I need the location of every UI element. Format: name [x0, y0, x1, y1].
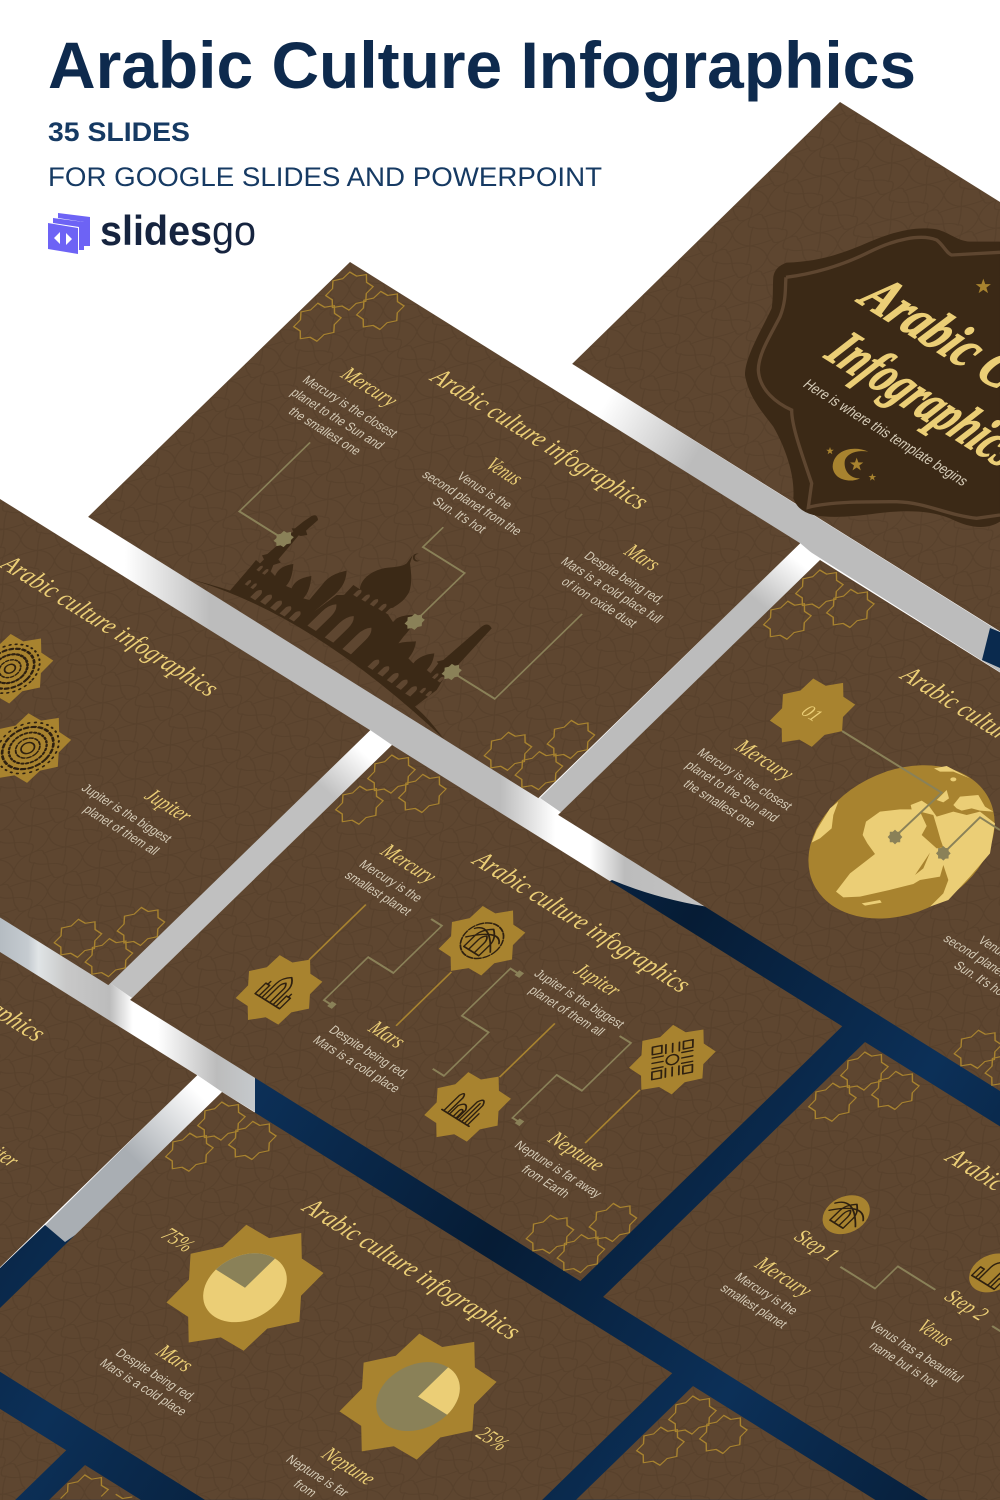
- finial crescent: [413, 554, 420, 562]
- text Mercury: the smallest one: [285, 404, 365, 458]
- star inside crescent: [850, 458, 863, 470]
- slide: pie charts: [0, 1092, 672, 1500]
- back sheet: [58, 213, 90, 246]
- text Venus: Venus has a beautiful: [866, 1319, 967, 1385]
- pie base: [186, 1240, 304, 1335]
- chevrons: [54, 232, 72, 245]
- corner ornaments bottom: [517, 1176, 646, 1280]
- connector three: [512, 1027, 631, 1134]
- header: [48, 28, 916, 254]
- inland sea: [920, 812, 943, 848]
- icon: tile: [652, 1040, 693, 1080]
- land upper right: [953, 795, 993, 812]
- corner ornaments: [45, 880, 174, 984]
- shadow band between mosque and globe slides: [540, 543, 820, 813]
- connector 02: [943, 817, 1000, 853]
- icon circle two: [959, 1246, 1000, 1300]
- inner motif: [459, 922, 506, 959]
- slide: bottom middle: [576, 1386, 875, 1500]
- mosque nodes: [269, 528, 466, 683]
- crescent: [833, 449, 868, 481]
- text Mars: Despite being red,: [112, 1346, 199, 1404]
- star with mandala two: [0, 699, 89, 797]
- gold line Mercury: [309, 905, 366, 960]
- text Mars: of iron oxide dust: [558, 575, 641, 630]
- shadow band under mosque slide: [60, 517, 1000, 1120]
- heading Jupiter: Jupiter: [568, 959, 626, 1001]
- slide: globe: [558, 560, 1000, 1096]
- land south: [862, 900, 882, 906]
- heading Mars: Mars: [150, 1340, 198, 1376]
- arches: [245, 565, 445, 697]
- star with tile icon: [611, 1011, 733, 1109]
- text Neptune: from: [290, 1477, 320, 1500]
- gold line Neptune: [585, 1090, 640, 1143]
- slide title: Arabic culture infographics: [465, 846, 697, 998]
- icon: [822, 1196, 871, 1233]
- narrow sea: [915, 853, 930, 875]
- text Jupiter: planet of them all: [526, 983, 608, 1039]
- mosque silhouette: [183, 515, 492, 738]
- land west: [812, 802, 838, 843]
- navy corner at right edge: [982, 628, 1000, 668]
- star upper right: [976, 279, 991, 293]
- text Venus: Venus is the: [454, 469, 516, 512]
- outer ring: [451, 916, 513, 965]
- pie chart 75 percent: [134, 1199, 356, 1376]
- text Jupiter: Jupiter is the biggest: [531, 967, 628, 1031]
- star left: [826, 447, 834, 454]
- icon: ornament: [451, 916, 513, 965]
- heading Venus: Venus: [912, 1316, 958, 1351]
- connector one: [324, 910, 442, 1016]
- text Mercury: planet to the Sun and: [682, 758, 782, 825]
- heading Jupiter: Jupiter: [139, 785, 197, 827]
- text Mars: Despite being red,: [581, 549, 668, 607]
- corner ornament one: [56, 1467, 113, 1500]
- centre circle: [666, 1054, 679, 1066]
- star: [421, 892, 543, 990]
- connector: [840, 1245, 935, 1312]
- text Venus: Sun. It's hot: [429, 495, 490, 536]
- disc: [959, 1246, 1000, 1300]
- slide: steps: [603, 1042, 1000, 1500]
- grid: [652, 1040, 693, 1080]
- icon circle one: [813, 1188, 880, 1241]
- star: [218, 941, 340, 1039]
- heading Neptune: Neptune: [542, 1127, 610, 1176]
- star: [407, 1058, 529, 1156]
- logo wordmark: slidesgo: [100, 207, 256, 254]
- slide background: [576, 1386, 875, 1500]
- land north: [934, 766, 970, 778]
- plaque: [745, 228, 1000, 527]
- node one: [327, 1001, 337, 1009]
- slide title: Arabic culture infographics: [0, 550, 225, 702]
- slide title: Arabic culture infographics: [423, 363, 655, 515]
- gold line Mars: [396, 972, 451, 1026]
- slide: bottom left: [49, 1465, 141, 1500]
- text Neptune: Neptune is far: [283, 1452, 352, 1500]
- slide: bottom far left: [0, 1169, 66, 1500]
- star: [134, 1199, 356, 1376]
- corner ornaments bottom: [945, 991, 1000, 1095]
- slide background: [130, 745, 842, 1281]
- text Mars: Mars is a cold place: [96, 1356, 190, 1419]
- connector right: [992, 1326, 1000, 1348]
- star with mosque icon: [218, 941, 340, 1039]
- slide: far left lower: [0, 794, 197, 1330]
- shadow band beside pie slide: [0, 1075, 222, 1308]
- text Venus: second planet from the: [419, 468, 525, 538]
- icon: arches: [255, 970, 304, 1009]
- pie base: [359, 1349, 477, 1444]
- connector 01: [842, 731, 942, 837]
- disc: [813, 1188, 880, 1241]
- front sheet: [48, 223, 78, 254]
- corner ornaments bottom: [475, 693, 604, 797]
- star: [307, 1308, 529, 1485]
- pie wedge: [418, 1367, 477, 1415]
- pie chart 25 percent: [307, 1308, 529, 1485]
- text Mars: Mars is a cold place full: [558, 555, 666, 626]
- connector two: [417, 969, 537, 1076]
- text Mercury: Mercury is the closest: [694, 746, 796, 813]
- node two: [515, 970, 524, 978]
- label step 2: Step 2: [939, 1286, 993, 1325]
- slide background: [0, 449, 370, 985]
- star: [611, 1011, 733, 1109]
- text Mercury: the smallest one: [680, 777, 759, 831]
- corner ornament two: [116, 1490, 132, 1500]
- title: Arabic Culture Infographics: [48, 28, 916, 102]
- label step 1: Step 1: [789, 1226, 844, 1266]
- node 01: [888, 830, 902, 844]
- slide background: [0, 1169, 66, 1500]
- label 75 percent: 75%: [156, 1224, 199, 1257]
- text Jupiter: Jupiter is the biggest: [78, 781, 175, 846]
- node Mercury: [269, 528, 298, 550]
- cover background: [572, 102, 1000, 654]
- heading Mars: Mars: [362, 1017, 410, 1053]
- text Mercury: Mercury is the: [356, 857, 426, 905]
- slide title: Arabic culture infographics: [295, 1193, 527, 1345]
- text Jupiter: planet of them all: [80, 802, 162, 858]
- star 01: [752, 664, 873, 761]
- heading Mercury: Mercury: [729, 735, 799, 785]
- star with minarets icon: [407, 1058, 529, 1156]
- shadow band under cover slide: [572, 364, 1000, 672]
- land peninsula: [937, 790, 949, 802]
- text Mercury: smallest planet: [717, 1281, 791, 1331]
- globe land and connectors: [812, 731, 1000, 907]
- text Mercury: smallest planet: [341, 868, 415, 918]
- land island: [950, 777, 956, 781]
- heading Venus: Venus: [481, 454, 528, 489]
- text Mercury: Mercury is the: [731, 1270, 801, 1318]
- star: [0, 620, 71, 718]
- corner ornaments top: [326, 747, 456, 851]
- corner ornaments: [627, 1388, 757, 1492]
- icon: slidesgo logo: [48, 213, 90, 254]
- heading Mars: Mars: [618, 540, 665, 575]
- star: [0, 699, 89, 797]
- node Venus: [400, 610, 429, 633]
- slide background: [88, 262, 800, 798]
- corner ornaments: [156, 1094, 286, 1198]
- connector Venus: [373, 527, 485, 622]
- cover subtitle: Here is where this template begins: [800, 376, 973, 489]
- corner ornaments top: [754, 562, 884, 666]
- slide background: [49, 1465, 141, 1500]
- label 25 percent: 25%: [471, 1423, 513, 1456]
- text Mercury: Mercury is the closest: [299, 373, 401, 441]
- slide background: [0, 794, 197, 1330]
- text Mars: Mars is a cold place: [310, 1033, 404, 1096]
- cover plaque art: [745, 228, 1000, 527]
- star lower right: [869, 473, 876, 481]
- node Mars: [437, 661, 466, 683]
- plaque inner line: [758, 237, 1000, 518]
- number 01: 01: [796, 701, 827, 726]
- star with ornament icon: [421, 892, 543, 990]
- slide: cover: [572, 102, 1000, 654]
- corner ornaments: [799, 1044, 929, 1148]
- text Neptune: from Earth: [518, 1163, 573, 1201]
- slide background: [558, 560, 1000, 1096]
- land main: [836, 801, 995, 907]
- star with mandala one: [0, 620, 71, 718]
- icon: [972, 1256, 1000, 1289]
- text Mercury: planet to the Sun and: [287, 386, 388, 452]
- navy background: [0, 880, 1000, 1500]
- node three: [515, 1118, 524, 1126]
- shadow band under left slide: [0, 915, 255, 1112]
- building and hill: [183, 515, 492, 738]
- text Mars: Despite being red,: [326, 1023, 413, 1081]
- heading Mercury: Mercury: [749, 1253, 818, 1302]
- slide: center four steps: [130, 745, 842, 1281]
- text Venus: name but is hot: [866, 1339, 942, 1390]
- connector Mars: [452, 587, 582, 699]
- middle sheet: [53, 218, 84, 250]
- icon: minarets: [442, 1088, 491, 1126]
- slide: mosque timeline: [88, 262, 800, 798]
- slide background: [0, 1092, 672, 1500]
- slide: left mandala: [0, 449, 370, 985]
- heading Mercury: Mercury: [335, 363, 403, 412]
- text Neptune: Neptune is far away: [511, 1138, 606, 1201]
- heading Neptune: Neptune: [316, 1443, 381, 1490]
- slide background: [603, 1042, 1000, 1500]
- gold line Jupiter: [500, 1023, 555, 1077]
- shadow band between left and center slides: [110, 730, 392, 998]
- globe disc: [770, 736, 1000, 947]
- node 02: [936, 846, 951, 861]
- subtitle: platforms: FOR GOOGLE SLIDES AND POWERPOINT: [48, 162, 602, 192]
- mandala: [0, 635, 52, 702]
- corner ornaments top: [284, 264, 414, 368]
- subtitle: slide count: 35 SLIDES: [48, 117, 190, 147]
- mandala: [0, 713, 72, 783]
- connector Mercury: [239, 442, 354, 539]
- heading Mercury: Mercury: [375, 840, 442, 888]
- pie wedge: [216, 1240, 275, 1288]
